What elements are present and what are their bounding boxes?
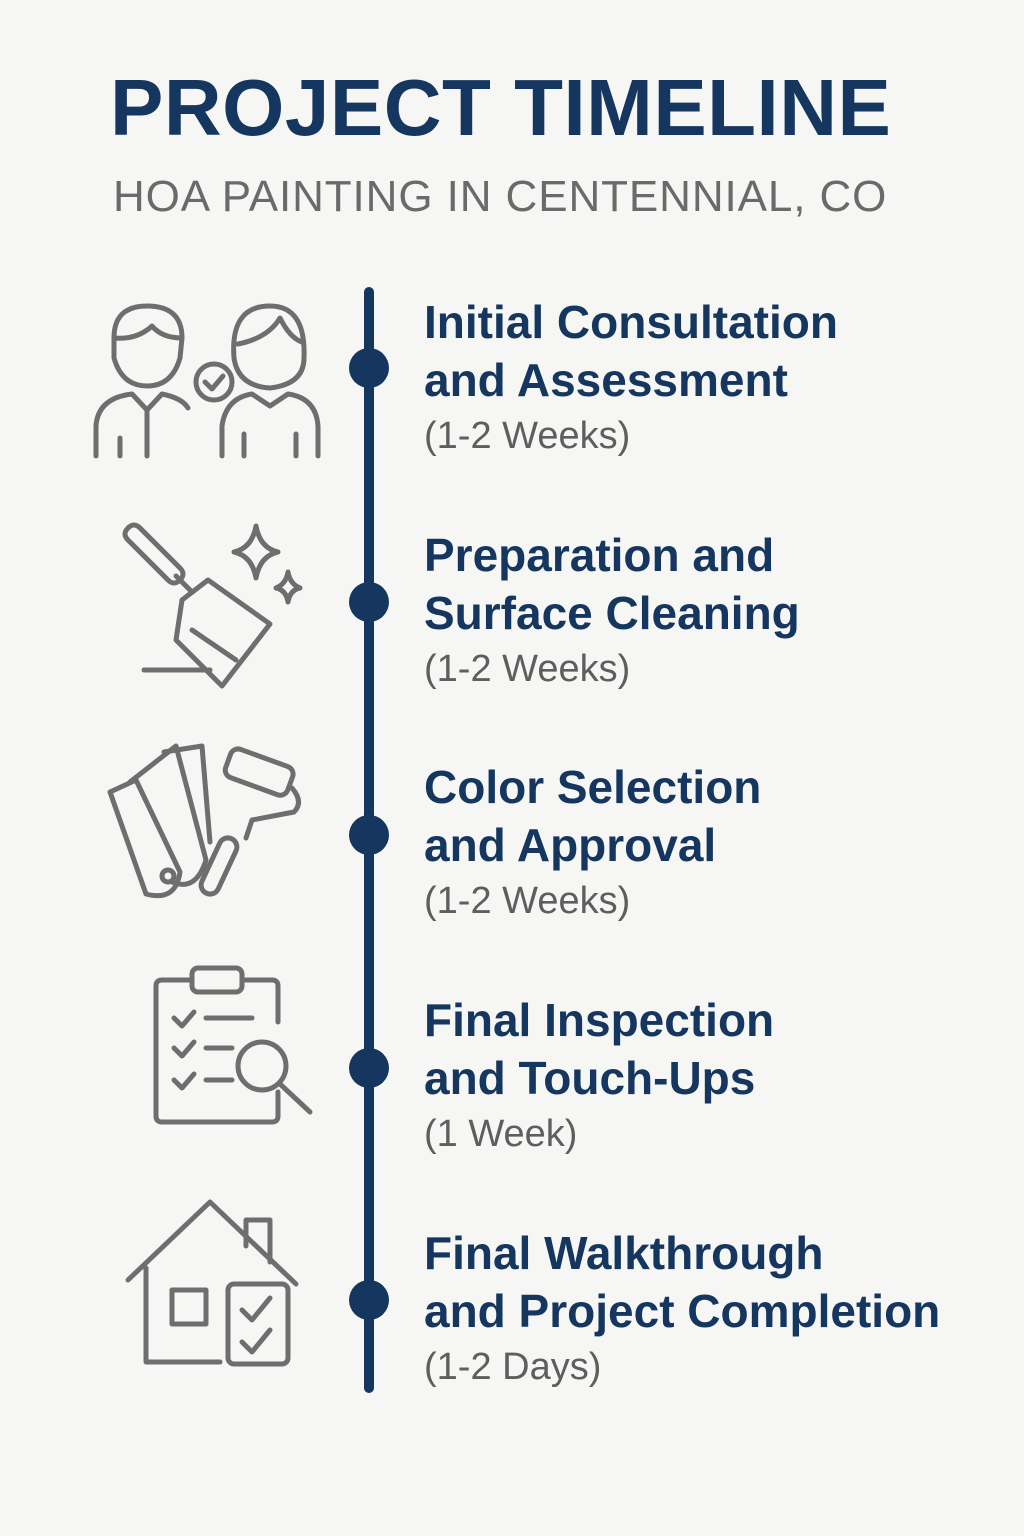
- step 5 text: (1-2 Days): [424, 1346, 601, 1388]
- timeline dot 4: [349, 1048, 389, 1088]
- timeline dot 2: [349, 582, 389, 622]
- step 3 text: and Approval: [424, 819, 716, 871]
- step 4 text: and Touch-Ups: [424, 1052, 755, 1104]
- step 5 text: and Project Completion: [424, 1285, 940, 1337]
- step 2 text: Preparation and: [424, 529, 774, 581]
- step 1 text: and Assessment: [424, 354, 788, 406]
- timeline dot 3: [349, 815, 389, 855]
- icon: color swatches and roller: [107, 744, 302, 898]
- timeline dot 1: [349, 348, 389, 388]
- subtitle: HOA PAINTING IN CENTENNIAL, CO: [113, 172, 887, 221]
- icon: clipboard with magnifier: [154, 966, 312, 1124]
- step 4 text: [424, 994, 774, 1155]
- timeline line: [364, 287, 374, 1393]
- step 3 text: [424, 761, 761, 922]
- step 2 text: (1-2 Weeks): [424, 648, 630, 690]
- timeline dot 5: [349, 1280, 389, 1320]
- title: PROJECT TIMELINE: [110, 63, 891, 152]
- step 4 text: Final Inspection: [424, 994, 774, 1046]
- step 2 text: [424, 529, 800, 690]
- step 5 text: Final Walkthrough: [424, 1227, 824, 1279]
- step 5 text: [424, 1227, 940, 1388]
- icon: scraper and sparkles: [122, 522, 302, 688]
- step 1 text: [424, 296, 838, 457]
- icon: consultation people: [94, 304, 320, 458]
- step 1 text: (1-2 Weeks): [424, 415, 630, 457]
- step 2 text: Surface Cleaning: [424, 587, 800, 639]
- step 3 text: (1-2 Weeks): [424, 880, 630, 922]
- step 4 text: (1 Week): [424, 1113, 577, 1155]
- icon: house with checklist: [126, 1200, 298, 1366]
- step 3 text: Color Selection: [424, 761, 761, 813]
- step 1 text: Initial Consultation: [424, 296, 838, 348]
